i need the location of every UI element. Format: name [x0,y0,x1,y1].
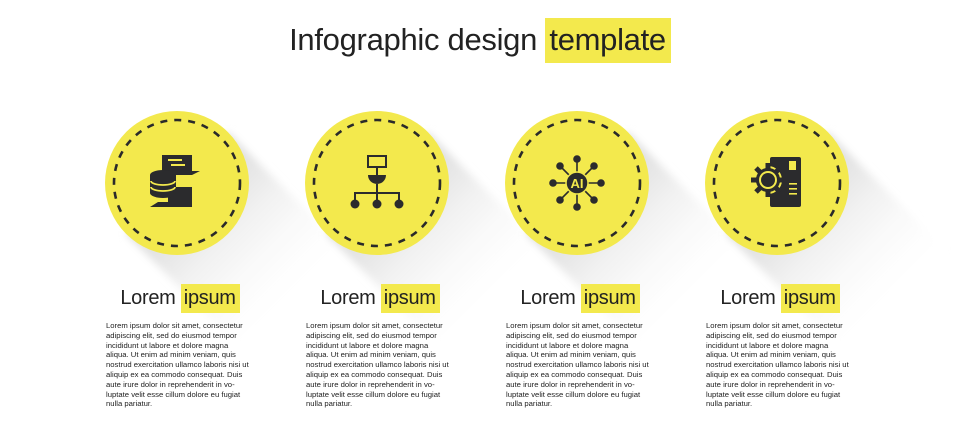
text block: aute irure dolor in reprehenderit in vo- [506,380,635,389]
text block: nostrud exercitation ullamco laboris nisi ut [506,360,649,369]
text block: aute irure dolor in reprehenderit in vo- [306,380,435,389]
icon: database chat [150,155,200,207]
icon: hierarchy [350,156,404,208]
text block: incididunt ut labore et dolore magna [706,341,828,350]
text block: aliquip ex ea commodo consequat. Duis [106,370,242,379]
panel: step 3 AI: AI [570,176,584,191]
text block: aliquip ex ea commodo consequat. Duis [506,370,642,379]
icon: AI network [549,155,605,211]
text block: adipiscing elit, sed do eiusmod tempor [706,331,837,340]
text block: aliqua. Ut enim ad minim veniam, quis [706,350,836,359]
text block: nostrud exercitation ullamco laboris nisi ut [106,360,249,369]
text block: aute irure dolor in reprehenderit in vo- [706,380,835,389]
text block: aliquip ex ea commodo consequat. Duis [706,370,842,379]
text block: nulla pariatur. [506,399,552,408]
text block [506,321,649,408]
text block: aliqua. Ut enim ad minim veniam, quis [306,350,436,359]
text block [706,321,849,408]
text block: aliqua. Ut enim ad minim veniam, quis [506,350,636,359]
heading: Lorem ipsum [720,287,836,309]
text block: aliquip ex ea commodo consequat. Duis [306,370,442,379]
text block: nulla pariatur. [106,399,152,408]
title: Infographic design template [289,22,666,57]
text block: nostrud exercitation ullamco laboris nisi ut [706,360,849,369]
text block: adipiscing elit, sed do eiusmod tempor [306,331,437,340]
text block: nostrud exercitation ullamco laboris nisi ut [306,360,449,369]
text block: Lorem ipsum dolor sit amet, consectetur [306,321,443,330]
panel: step 4 gear document [705,111,892,408]
text block: nulla pariatur. [306,399,352,408]
text block: luptate velit esse cillum dolore eu fugiat [106,390,240,399]
text block: luptate velit esse cillum dolore eu fugiat [306,390,440,399]
text block: incididunt ut labore et dolore magna [306,341,428,350]
text block: aliqua. Ut enim ad minim veniam, quis [106,350,236,359]
heading: Lorem ipsum [320,287,436,309]
text block: adipiscing elit, sed do eiusmod tempor [106,331,237,340]
text block: luptate velit esse cillum dolore eu fugiat [506,390,640,399]
text block: Lorem ipsum dolor sit amet, consectetur [506,321,643,330]
panel: step 1 database chat [105,111,292,408]
text block: Lorem ipsum dolor sit amet, consectetur [106,321,243,330]
text block [106,321,249,408]
text block: luptate velit esse cillum dolore eu fugiat [706,390,840,399]
heading: Lorem ipsum [120,287,236,309]
text block: Lorem ipsum dolor sit amet, consectetur [706,321,843,330]
icon: gear document [751,157,801,207]
text block [306,321,449,408]
text block: adipiscing elit, sed do eiusmod tempor [506,331,637,340]
text block: nulla pariatur. [706,399,752,408]
text block: incididunt ut labore et dolore magna [106,341,228,350]
text block: aute irure dolor in reprehenderit in vo- [106,380,235,389]
text block: incididunt ut labore et dolore magna [506,341,628,350]
heading: Lorem ipsum [520,287,636,309]
panel: step 2 hierarchy [305,111,492,408]
panel: step 3 AI [505,111,692,408]
